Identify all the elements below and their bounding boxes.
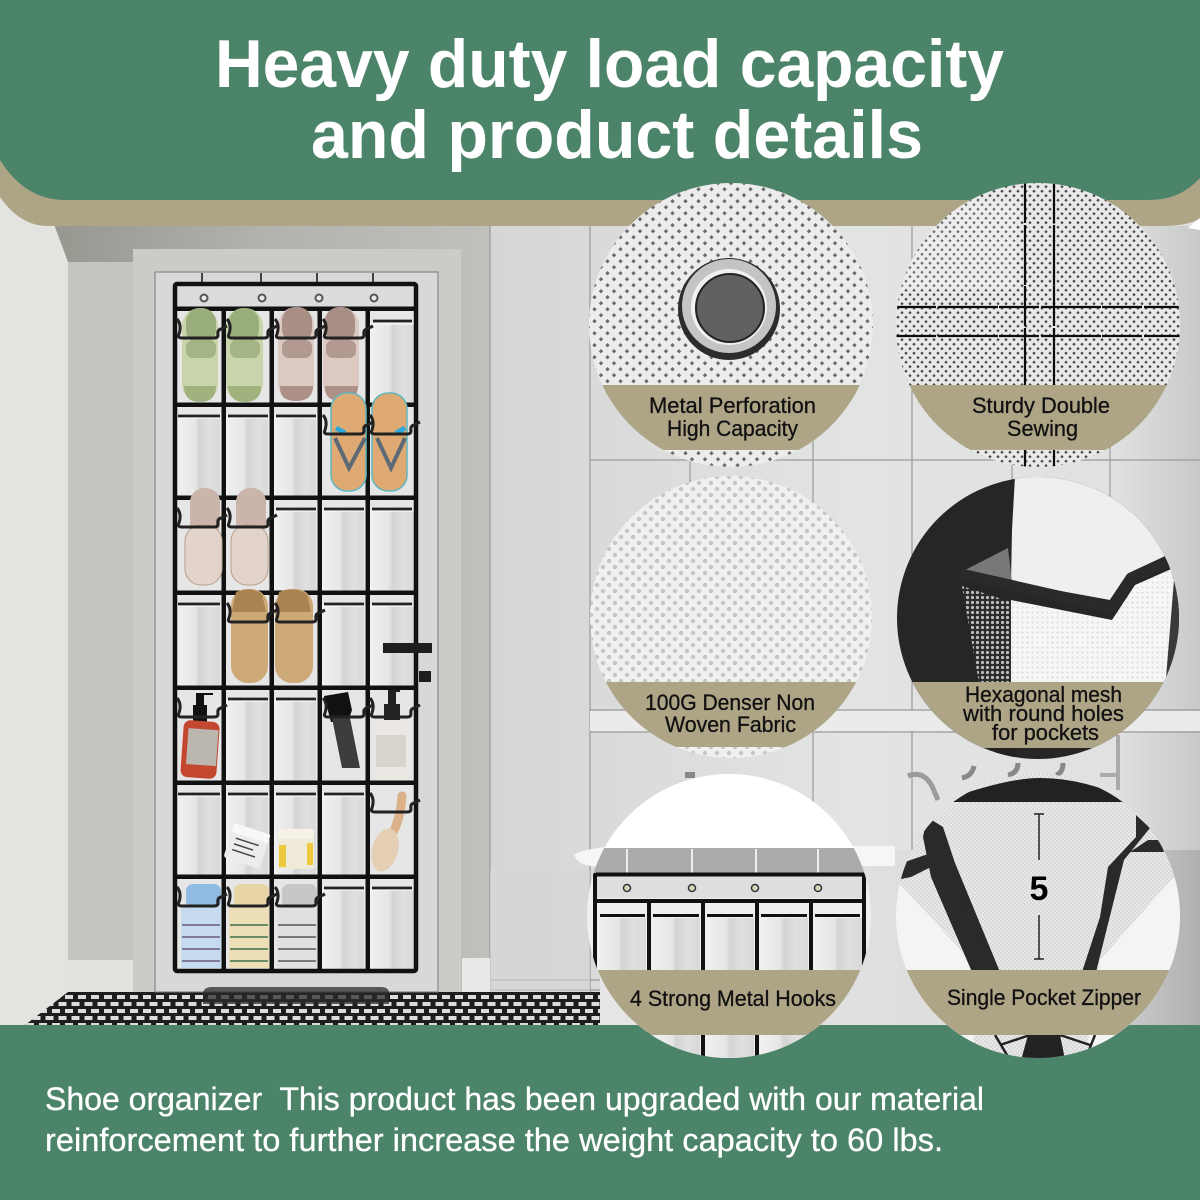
organizer border xyxy=(175,284,416,971)
caption: for pockets xyxy=(992,720,1099,745)
caption: with round holes xyxy=(962,701,1124,726)
size marker: 5 xyxy=(1030,870,1048,908)
title: Heavy duty load capacity xyxy=(215,26,1004,102)
bottom green band xyxy=(0,1025,1200,1200)
caption xyxy=(649,393,816,441)
detail circle: hexagonal mesh xyxy=(890,476,1190,760)
green slippers xyxy=(182,308,263,402)
caption band xyxy=(909,385,1166,450)
title xyxy=(215,26,1004,173)
pocket hem xyxy=(962,556,1170,600)
caption: Metal Perforation xyxy=(649,393,816,418)
door handle xyxy=(383,643,432,682)
yellow label jar xyxy=(278,829,314,869)
grid bars xyxy=(173,306,418,972)
grommets xyxy=(200,294,378,302)
back wall behind door xyxy=(45,226,490,992)
caption: Sturdy Double xyxy=(972,393,1110,418)
caption: Sewing xyxy=(1007,416,1078,441)
caption band xyxy=(906,970,1170,1035)
caption: Woven Fabric xyxy=(665,712,796,737)
size marker xyxy=(1030,814,1048,959)
detail circle: metal perforation xyxy=(580,183,880,467)
shoe organizer xyxy=(173,273,420,973)
organizer bars xyxy=(593,873,866,1064)
mauve slippers xyxy=(278,307,359,401)
filled pocket hems xyxy=(177,319,420,906)
top black edge xyxy=(953,778,1123,802)
stitching xyxy=(896,183,1180,467)
caption band xyxy=(602,385,860,450)
bottom description: Shoe organizer This product has been upgraded with our material xyxy=(45,1081,984,1117)
door mat xyxy=(203,987,389,1004)
detail circle: metal hooks xyxy=(580,770,880,1064)
skirting xyxy=(68,960,133,992)
black tube xyxy=(324,692,360,779)
lower white mesh xyxy=(1011,566,1178,700)
bathroom background xyxy=(0,190,1200,1030)
organizer body xyxy=(173,282,418,973)
dark mesh side xyxy=(962,586,1011,682)
white jar xyxy=(223,823,271,869)
fabric texture xyxy=(589,183,873,467)
top tan band xyxy=(0,120,1200,226)
caption: Hexagonal mesh xyxy=(965,682,1122,707)
metal grommet xyxy=(678,258,780,360)
caption band xyxy=(598,970,860,1035)
caption band xyxy=(606,682,856,747)
cork sandals xyxy=(231,589,313,683)
caption xyxy=(646,694,814,732)
caption xyxy=(962,682,1124,745)
grey door strip xyxy=(594,848,864,873)
red pump bottle xyxy=(180,693,220,779)
white pump bottle xyxy=(375,690,409,780)
right tiled wall xyxy=(490,226,1200,1026)
caption: Single Pocket Zipper xyxy=(947,985,1141,1010)
empty pocket hems xyxy=(178,321,412,888)
organizer header xyxy=(585,873,875,1063)
caption xyxy=(972,393,1110,441)
door xyxy=(133,249,461,1004)
mesh backdrop xyxy=(896,774,1180,1064)
empty pockets xyxy=(177,324,415,970)
detail circle: non woven fabric xyxy=(580,476,880,760)
upper white fabric xyxy=(1011,477,1166,600)
title: and product details xyxy=(311,97,923,173)
dark backdrop xyxy=(896,476,1180,760)
caption: 4 Strong Metal Hooks xyxy=(630,986,836,1011)
caption band xyxy=(912,682,1164,748)
floor tiles xyxy=(25,992,600,1026)
bottom description: reinforcement to further increase the weight capacity to 60 lbs. xyxy=(45,1122,943,1158)
bottom description xyxy=(45,1081,984,1158)
fabric texture xyxy=(589,476,873,760)
caption: 100G Denser Non xyxy=(645,690,815,715)
detail circle: double sewing xyxy=(890,183,1190,467)
bath xyxy=(600,850,1200,1026)
beige slippers xyxy=(185,488,268,585)
rolled towels xyxy=(181,884,317,968)
fabric texture xyxy=(896,183,1180,467)
pocket panels xyxy=(598,918,862,1058)
lower straps xyxy=(1022,1035,1064,1058)
door leaf xyxy=(155,272,438,992)
header band xyxy=(176,287,415,309)
detail circle: pocket zipper xyxy=(890,774,1190,1064)
door frame xyxy=(133,249,461,992)
organizer hooks xyxy=(202,273,373,283)
faucets xyxy=(908,774,938,800)
left wall xyxy=(0,200,68,1025)
hook grommets xyxy=(624,884,822,892)
bath brush xyxy=(367,796,403,875)
white backdrop xyxy=(604,774,854,848)
right strap xyxy=(1082,815,1150,972)
flip-flops xyxy=(331,393,407,491)
caption: High Capacity xyxy=(667,416,798,441)
top green band xyxy=(0,0,1200,200)
left strap xyxy=(923,817,1000,972)
